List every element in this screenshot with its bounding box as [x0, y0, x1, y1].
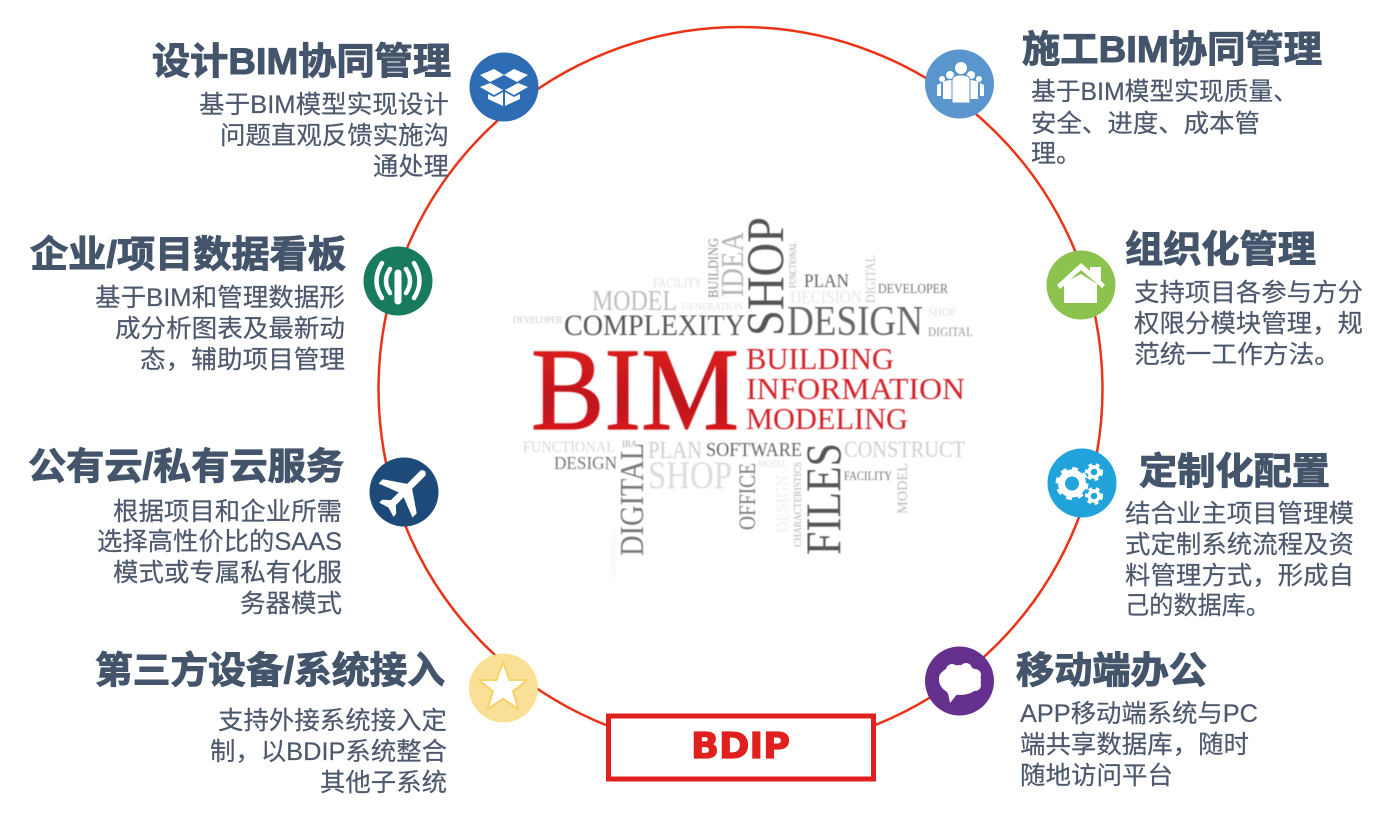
description: 成分析图表及最新动: [115, 315, 345, 343]
icon: airplane: [369, 454, 442, 527]
central BIM word cloud: DECISION: [790, 287, 862, 307]
description: [199, 91, 449, 181]
description: [97, 498, 342, 618]
description: 安全、进度、成本管: [1031, 110, 1260, 138]
description: [1020, 700, 1258, 790]
description: 权限分模块管理，规: [1134, 310, 1363, 338]
icon: people group: [925, 50, 994, 118]
heading: 设计BIM协同管理: [152, 41, 451, 82]
central BIM word cloud: MODEL: [592, 286, 677, 317]
BDIP label box: [608, 716, 874, 779]
central BIM word cloud: [513, 217, 973, 580]
description: APP移动端系统与PC: [1020, 700, 1258, 728]
description: 范统一工作方法。: [1134, 341, 1340, 369]
icon: gears: [1048, 448, 1116, 518]
central BIM word cloud: DESIGN: [787, 299, 923, 345]
central BIM word cloud: COMPATIBLE: [610, 530, 618, 580]
heading: 组织化管理: [1125, 229, 1316, 270]
description: 制，以BDIP系统整合: [210, 738, 447, 766]
central BIM word cloud: COMPLEXITY: [564, 309, 745, 342]
central BIM word cloud: CHARACTERISTICS: [792, 462, 804, 547]
panel: 施工BIM协同管理: [925, 29, 1322, 168]
central BIM word cloud: SHOP: [928, 305, 956, 319]
description: [95, 284, 345, 374]
description: 问题直观反馈实施沟: [220, 122, 449, 150]
icon: star: [469, 654, 538, 722]
central BIM word cloud: PLAN: [804, 271, 849, 292]
panel: 移动端办公: [925, 646, 1258, 790]
description: 态，辅助项目管理: [140, 346, 345, 374]
icon: antenna signal: [364, 246, 432, 316]
central BIM word cloud: PLAN: [648, 438, 702, 464]
panel: 企业/项目数据看板: [30, 234, 432, 374]
central BIM word cloud: BIM: [531, 324, 739, 455]
heading: 公有云/私有云服务: [28, 446, 344, 487]
central BIM word cloud: SHOP: [737, 217, 795, 336]
heading: 定制化配置: [1139, 451, 1330, 492]
central BIM word cloud: GENERATION: [682, 302, 743, 313]
central BIM word cloud: FACILITY: [844, 468, 892, 483]
description: 结合业主项目管理模: [1125, 500, 1354, 528]
central BIM word cloud: DIGITAL: [928, 324, 973, 339]
central BIM word cloud: OFFICE: [735, 463, 760, 530]
central BIM word cloud: MODEL: [895, 463, 911, 514]
central BIM word cloud: BUILDING: [706, 238, 722, 298]
central BIM word cloud: BUILDING: [746, 341, 894, 376]
central BIM word cloud: DESIGN: [554, 453, 617, 473]
description: 基于BIM和管理数据形: [95, 284, 345, 312]
heading: 移动端办公: [1016, 650, 1207, 691]
heading: 施工BIM协同管理: [1022, 29, 1322, 70]
description: 随地访问平台: [1020, 762, 1173, 790]
description: 其他子系统: [320, 769, 447, 797]
central BIM word cloud: SHOP: [648, 454, 732, 497]
central BIM word cloud: CONSTRUCT: [844, 437, 965, 462]
central BIM word cloud: IDEA: [714, 232, 750, 297]
central BIM word cloud: IBA: [622, 439, 637, 449]
icon: speech cloud: [925, 646, 994, 716]
icon: open box: [470, 52, 538, 122]
central BIM word cloud: FUNCTIONAL: [788, 242, 798, 288]
description: [1125, 500, 1354, 620]
description: 选择高性价比的SAAS: [97, 528, 342, 556]
central BIM word cloud: DEVELOPER: [513, 315, 562, 325]
panel: 设计BIM协同管理: [152, 41, 538, 181]
description: 支持外接系统接入定: [218, 707, 447, 735]
description: 模式或专属私有化服: [113, 559, 342, 587]
description: 通处理: [373, 153, 449, 181]
central BIM word cloud: DIGITAL: [864, 255, 879, 303]
panel: 组织化管理: [1046, 229, 1363, 369]
panel: 定制化配置: [1048, 448, 1354, 620]
description: 根据项目和企业所需: [113, 498, 342, 526]
description: 料管理方式，形成自: [1125, 562, 1354, 590]
central BIM word cloud: DEVELOPER: [878, 282, 949, 297]
description: 基于BIM模型实现设计: [199, 91, 449, 119]
BDIP label box: BDIP: [691, 726, 790, 767]
description: 理。: [1031, 140, 1081, 168]
description: 式定制系统流程及资: [1125, 531, 1354, 559]
description: 务器模式: [240, 590, 342, 618]
description: [210, 707, 447, 797]
description: 端共享数据库，随时: [1020, 731, 1249, 759]
panel: 公有云/私有云服务: [28, 446, 442, 618]
central BIM word cloud: FILES: [795, 443, 851, 555]
central BIM word cloud: FACILITY: [653, 276, 702, 291]
icon: house: [1046, 250, 1116, 320]
central BIM word cloud: FUNCTIONAL: [523, 439, 615, 456]
description: 己的数据库。: [1125, 592, 1270, 620]
heading: 企业/项目数据看板: [30, 234, 346, 275]
description: 支持项目各参与方分: [1134, 279, 1363, 307]
central BIM word cloud: DIGITAL: [614, 443, 651, 556]
red ring connecting the modules: [378, 27, 1102, 751]
description: [1031, 78, 1298, 168]
central BIM word cloud: INFORMATION: [746, 371, 965, 406]
central BIM word cloud: DESIGN: [772, 475, 792, 533]
heading: 第三方设备/系统接入: [95, 650, 445, 691]
central BIM word cloud: MODELING: [746, 401, 908, 436]
description: 基于BIM模型实现质量、: [1031, 78, 1298, 106]
central BIM word cloud: MODEL: [758, 459, 787, 469]
description: [1134, 279, 1363, 369]
panel: 第三方设备/系统接入: [95, 650, 538, 797]
central BIM word cloud: SOFTWARE: [706, 439, 802, 461]
